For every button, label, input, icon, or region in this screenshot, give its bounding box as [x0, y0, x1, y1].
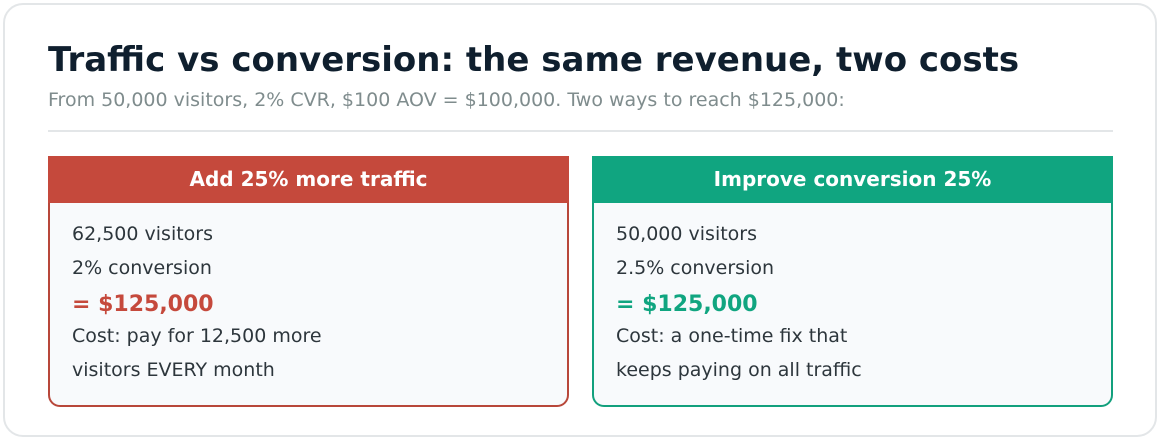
divider [48, 130, 1113, 132]
text: visitors: 50,000 visitors [616, 223, 757, 245]
text: cost line one: Cost: a one-time fix that [616, 325, 847, 347]
text: cost line two: keeps paying on all traffic [616, 359, 862, 381]
panel heading: improve conversion [592, 156, 1113, 203]
panel body: add traffic [48, 203, 569, 407]
text: cost line two: visitors EVERY month [72, 359, 275, 381]
text: cost line one: Cost: pay for 12,500 more [72, 325, 322, 347]
panel body: improve conversion [592, 203, 1113, 407]
panel heading: add traffic [48, 156, 569, 203]
panel heading: add traffic: Add 25% more traffic [190, 167, 427, 191]
text: visitors: 62,500 visitors [72, 223, 213, 245]
result: revenue: = $125,000 [72, 292, 214, 317]
subtitle: From 50,000 visitors, 2% CVR, $100 AOV = $100,000. Two ways to reach $125,000: [48, 89, 845, 111]
text: conversion: 2% conversion [72, 257, 212, 279]
panel: improve conversion [592, 156, 1113, 407]
text: conversion: 2.5% conversion [616, 257, 774, 279]
panel heading: improve conversion: Improve conversion 25% [714, 167, 991, 191]
title: Traffic vs conversion: the same revenue, two costs [48, 40, 1019, 80]
panel: add traffic [48, 156, 569, 407]
result: revenue: = $125,000 [616, 292, 758, 317]
